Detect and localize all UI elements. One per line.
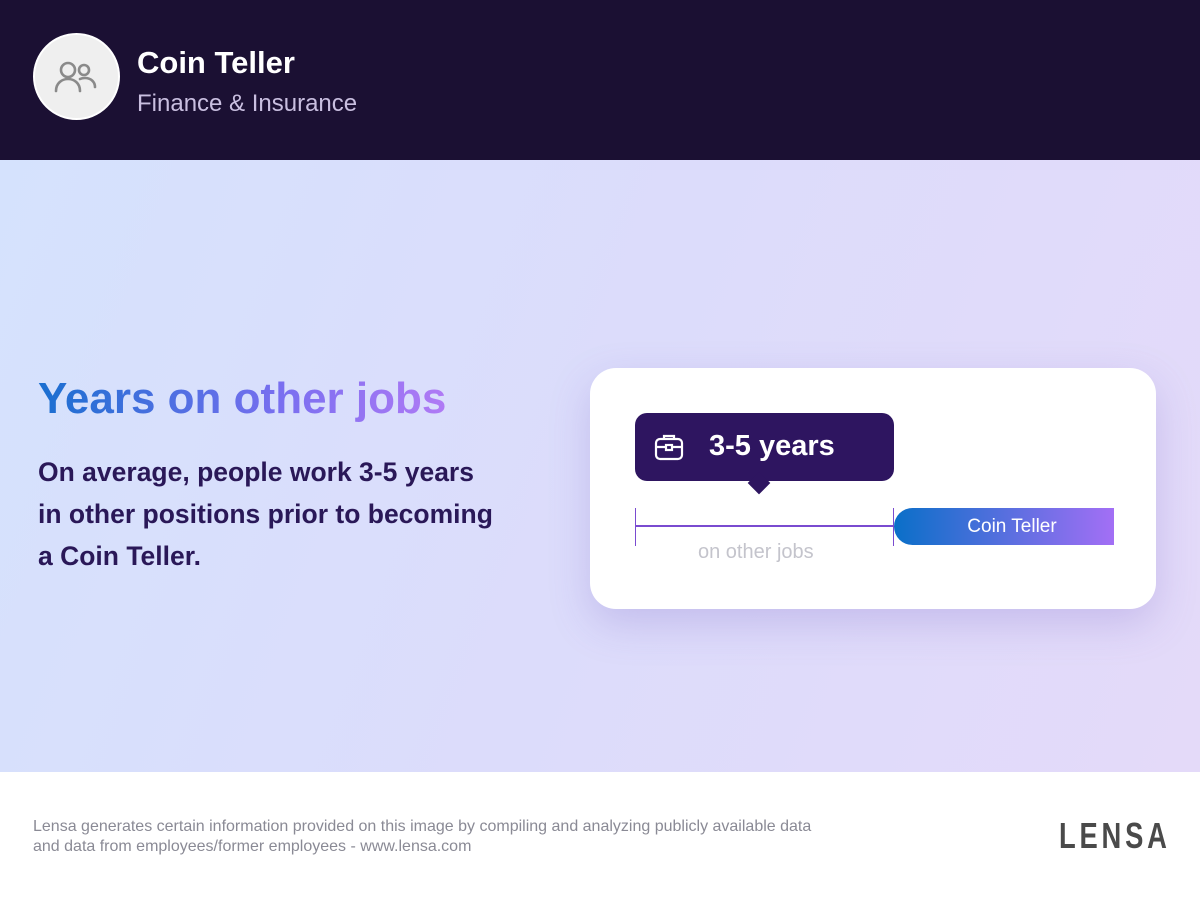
timeline line [635, 508, 894, 546]
footer text [33, 818, 812, 855]
callout: 3-5 years: 3-5 years [709, 430, 835, 462]
callout: 3-5 years [635, 413, 894, 481]
logo: LENSA [1059, 815, 1171, 856]
footer text: and data from employees/former employees - www.lensa.com [33, 838, 471, 855]
bar: Coin Teller: Coin Teller [967, 516, 1057, 537]
heading: Years on other jobs [38, 374, 446, 423]
text block [38, 457, 493, 571]
subtitle: Finance & Insurance [137, 90, 357, 117]
label: on other jobs: on other jobs [698, 541, 814, 563]
header [0, 0, 1200, 160]
footer text: Lensa generates certain information provided on this image by compiling and analyzing publicly available data [33, 818, 811, 835]
text block: a Coin Teller. [38, 541, 201, 571]
bar: Coin Teller [894, 508, 1114, 545]
text block: in other positions prior to becoming [38, 499, 493, 529]
main background [0, 160, 1200, 772]
icon: avatar [33, 33, 120, 120]
text block: On average, people work 3-5 years [38, 457, 474, 487]
icon: briefcase [654, 434, 684, 460]
panel: chart card [590, 368, 1156, 609]
title: Coin Teller [137, 45, 295, 80]
